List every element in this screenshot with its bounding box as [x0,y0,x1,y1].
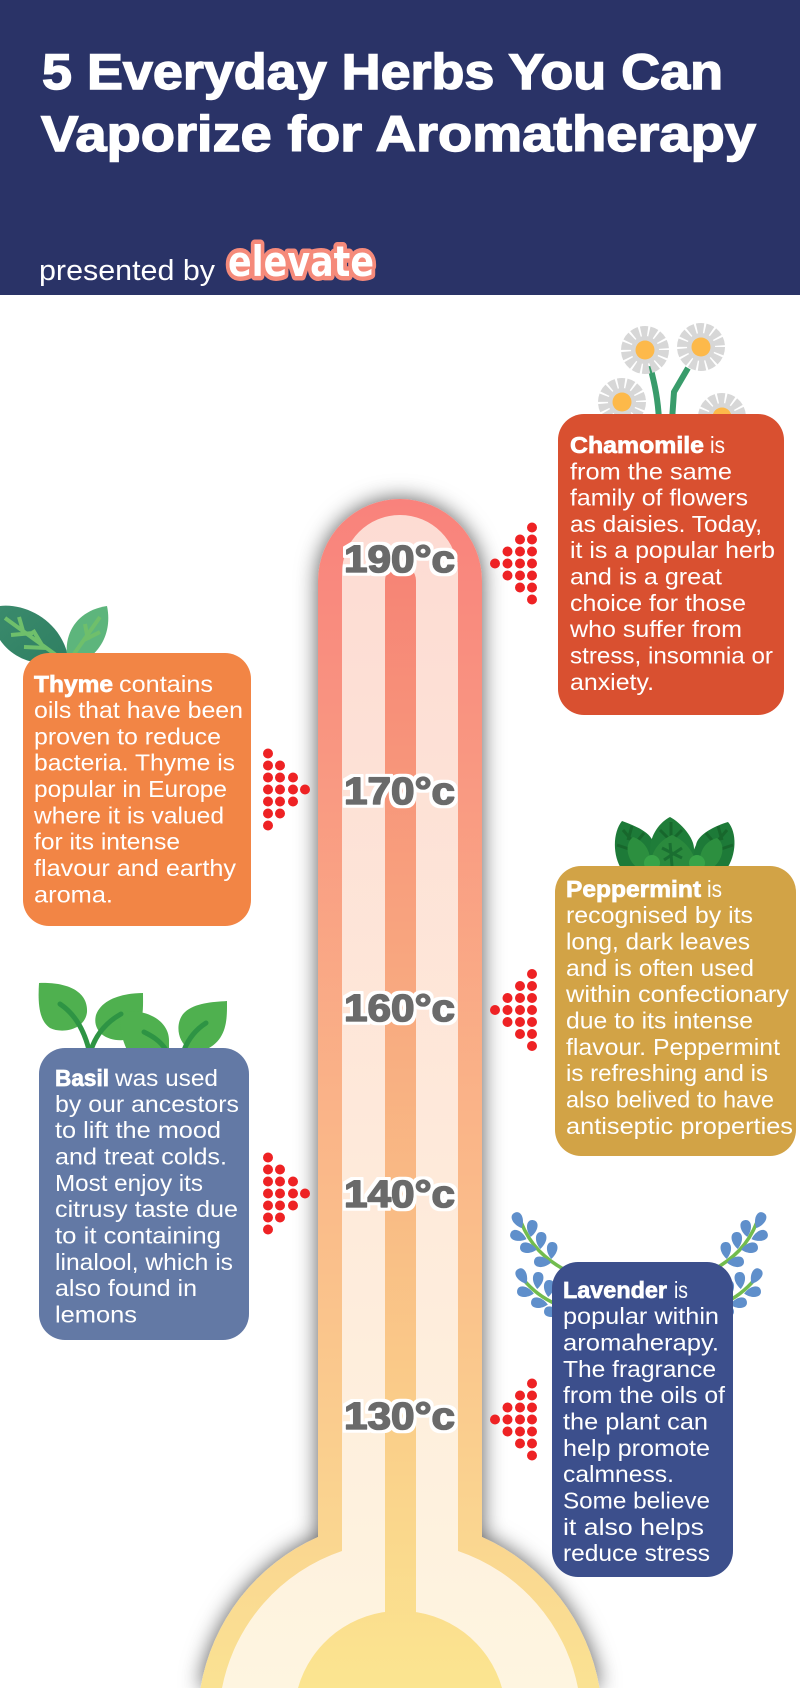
panel: chamomile: stress, insomnia or [570,642,773,668]
panel: thyme: for its intense [34,828,180,854]
panel: thyme: flavour and earthy [34,855,237,881]
panel: thyme: popular in Europe [34,776,227,802]
panel: basil: Most enjoy its [55,1170,203,1196]
panel: chamomile: who suffer from [569,616,742,642]
panel: lavender: it also helps [563,1514,704,1540]
panel: peppermint: also belived to have [566,1086,774,1112]
panel: basil: Basil [55,1065,109,1091]
panel: chamomile: it is a popular herb [570,537,775,563]
panel: basil: linalool, which is [55,1249,233,1275]
panel: lavender: calmness. [563,1461,674,1487]
panel: lavender: Lavender [563,1277,667,1303]
arrow: peppermint [490,969,537,1051]
panel: chamomile: and is a great [570,564,723,590]
arrow: chamomile [490,522,537,604]
temperature 190: 190°c [344,539,455,581]
thermometer bulb fill [298,1611,502,1688]
panel: peppermint: within confectionary [565,981,790,1007]
temperature 170: 170°c [344,771,455,813]
icon: peppermint leaves [615,817,735,871]
temperature 140: 140°c [344,1174,455,1216]
panel: chamomile: from the same [570,458,732,484]
panel: lavender: reduce stress [563,1540,710,1566]
panel: lavender: from the oils of [563,1382,726,1408]
header band [0,0,800,295]
panel: peppermint: recognised by its [566,902,753,928]
panel: thyme: bacteria. Thyme is [34,750,235,776]
panel: chamomile: as daisies. Today, [570,511,762,537]
panel: lavender: popular within [563,1303,719,1329]
panel: chamomile: family of flowers [570,484,748,510]
arrow: lavender [490,1378,537,1460]
panel: chamomile: is [710,432,725,458]
panel: lavender: aromaherapy. [563,1330,719,1356]
title: Vaporize for Aromatherapy [41,106,756,162]
panel: basil: also found in [55,1275,197,1301]
panel: basil: to it containing [55,1222,221,1248]
panel: peppermint: and is often used [566,955,754,981]
panel: basil: by our ancestors [55,1091,239,1117]
panel: lavender: is [674,1277,688,1303]
arrow: thyme [263,748,310,830]
panel: basil: and treat colds. [55,1144,227,1170]
panel: peppermint: Peppermint [566,876,701,902]
panel: thyme [23,653,251,926]
icon: thyme leaves [0,606,108,663]
thermometer outer tube and bulb [200,499,600,1688]
icon: basil leaves [39,983,227,1052]
temperature 160: 160°c [344,988,455,1030]
panel: basil [39,1048,249,1340]
panel: lavender: help promote [563,1435,710,1461]
title: 5 Everyday Herbs You Can [42,44,723,100]
panel: thyme: proven to reduce [34,724,221,750]
elevate logo: elevate [228,237,374,286]
panel: basil: was used [114,1065,218,1091]
icon: lavender right sprigs [713,1211,769,1319]
title [41,44,756,162]
thermometer [200,499,600,1688]
panel: basil: to lift the mood [55,1117,221,1143]
panel: peppermint: is refreshing and is [566,1060,768,1086]
panel: basil: lemons [55,1302,137,1328]
panel: chamomile [558,414,784,715]
panel: peppermint: due to its intense [566,1008,753,1034]
presented by text: presented by [39,255,216,287]
icon: lavender left sprigs [509,1211,565,1319]
panel: chamomile: choice for those [570,590,746,616]
arrow: basil [263,1152,310,1234]
panel: thyme: contains [119,671,213,697]
thermometer mercury [385,565,416,1688]
panel: peppermint: antiseptic properties [566,1113,793,1139]
panel: chamomile: anxiety. [570,669,654,695]
panel: basil: citrusy taste due [55,1196,238,1222]
panel: thyme: Thyme [34,671,113,697]
panel: peppermint: long, dark leaves [566,928,750,954]
panel: lavender: Some believe [563,1488,710,1514]
panel: lavender: The fragrance [563,1356,716,1382]
icon: chamomile flowers [604,329,740,435]
panel: peppermint: is [707,876,722,902]
panel: thyme: aroma. [34,882,113,908]
thermometer inner glass [222,515,578,1688]
panel: peppermint [555,866,796,1156]
panel: lavender: the plant can [563,1408,708,1434]
panel: chamomile: Chamomile [570,432,704,458]
panel: thyme: where it is valued [33,802,224,828]
panel: lavender [552,1262,733,1577]
panel: peppermint: flavour. Peppermint [566,1034,781,1060]
panel: thyme: oils that have been [34,697,243,723]
temperature 130: 130°c [344,1396,455,1438]
